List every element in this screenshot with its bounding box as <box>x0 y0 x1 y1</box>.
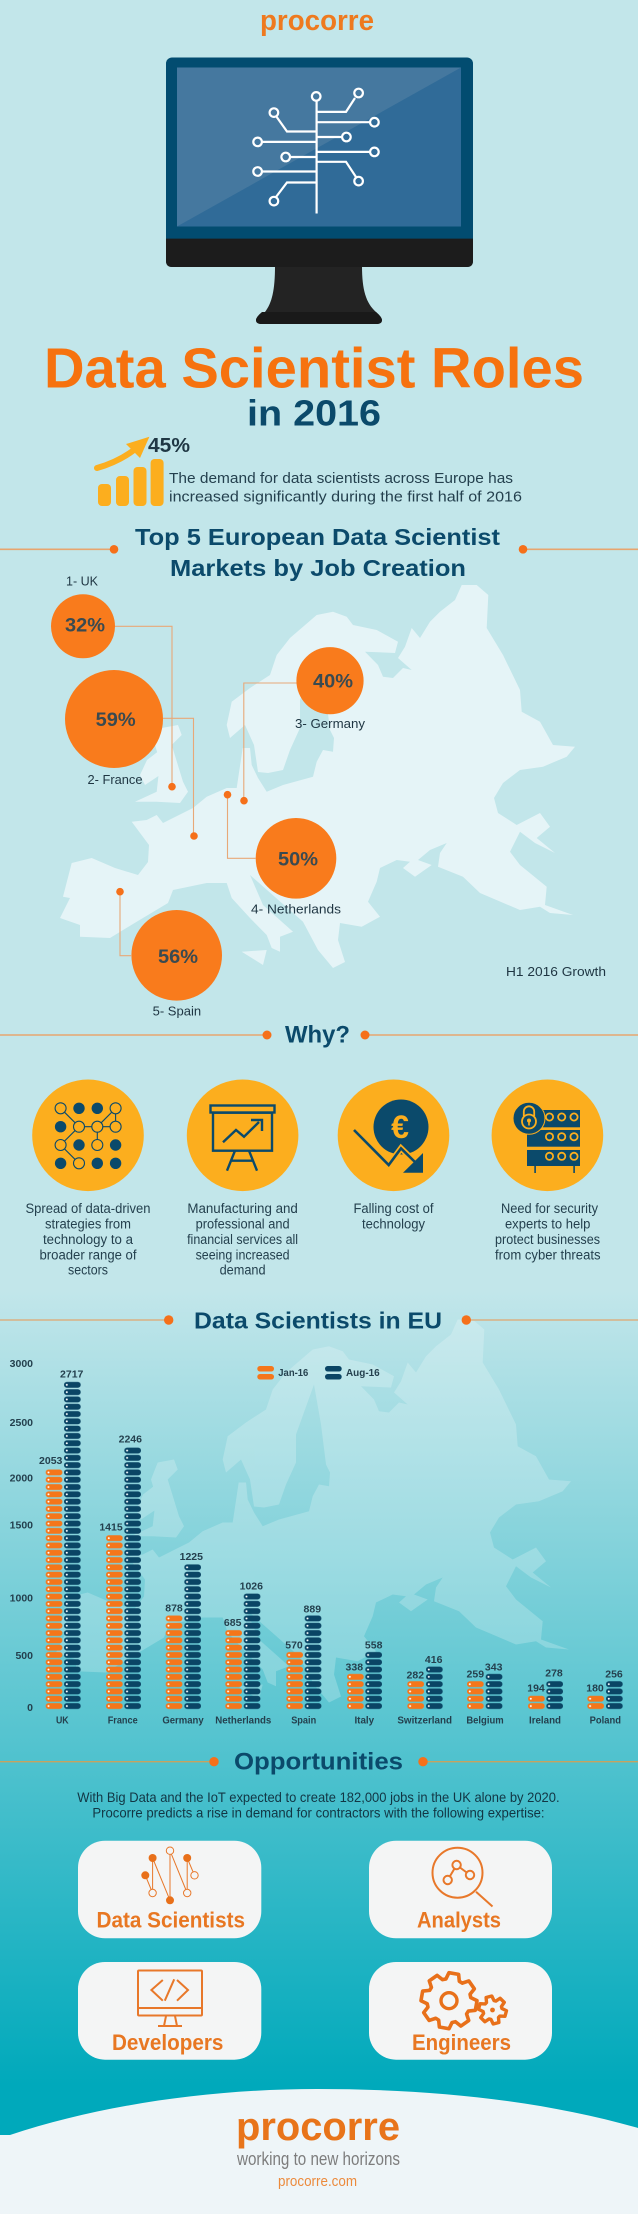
reason: security experts: protect businesses <box>495 1232 600 1247</box>
chart: y axis labels: 2000 <box>10 1472 33 1484</box>
reason: data-driven strategies: technology to a <box>43 1232 133 1247</box>
reason: security experts: Need for security <box>501 1201 598 1216</box>
chart: country labels: Poland <box>590 1714 621 1726</box>
reason: falling cost of technology: technology <box>362 1217 425 1232</box>
reason: falling cost of technology: € <box>391 1109 409 1145</box>
chart: value labels: 416 <box>425 1654 443 1666</box>
market: Germany: 40% <box>313 670 353 692</box>
reason: falling cost of technology: Falling cost of <box>354 1201 434 1216</box>
chart: country labels: UK <box>56 1714 69 1726</box>
market: Spain: 5- Spain <box>153 1004 201 1018</box>
chart: value labels: 278 <box>545 1667 563 1679</box>
chart: country labels: Germany <box>162 1714 204 1726</box>
chart: value labels: 2246 <box>119 1434 142 1446</box>
reason: data-driven strategies <box>26 1080 150 1277</box>
logo: Procorre top: procorre <box>260 5 374 37</box>
footer panel <box>0 2089 638 2214</box>
reason: manufacturing and services: financial services all <box>187 1232 298 1247</box>
market markers <box>116 783 248 896</box>
market: Germany: 3- Germany <box>295 717 366 731</box>
tagline: working to new horizons <box>236 2149 400 2169</box>
market: France: 2- France <box>88 773 143 787</box>
website: procorre.com <box>278 2173 357 2190</box>
chart: country labels: Italy <box>354 1714 374 1726</box>
chart: value labels: 1415 <box>99 1522 123 1534</box>
card: data scientists: Data Scientists <box>96 1907 245 1932</box>
stat: 45% demand: increased significantly during the first half of 2016 <box>169 488 522 505</box>
market: Netherlands: 4- Netherlands <box>251 902 341 916</box>
reason: data-driven strategies: strategies from <box>45 1217 131 1232</box>
chart: bars <box>46 1381 623 1710</box>
map: chart background Europe <box>56 1320 571 1702</box>
market: UK: 32% <box>65 615 105 637</box>
chart legend: Jan-16 <box>278 1367 308 1379</box>
chart: value labels: 256 <box>605 1668 623 1680</box>
title <box>44 336 584 433</box>
chart legend <box>257 1366 380 1380</box>
chart: country labels: France <box>108 1714 138 1726</box>
icon: desktop monitor with circuit <box>166 58 473 324</box>
title: in 2016 <box>247 392 381 433</box>
chart: value labels: 338 <box>346 1661 363 1673</box>
chart: country labels <box>56 1714 621 1726</box>
chart: country labels: Switzerland <box>397 1714 452 1726</box>
chart: y axis labels: 0 <box>27 1702 33 1714</box>
card: analysts: Analysts <box>417 1907 501 1932</box>
note: H1 2016 Growth: H1 2016 Growth <box>506 965 606 979</box>
heading: opportunities <box>0 1748 638 1775</box>
heading: data scientists in EU: Data Scientists in EU <box>194 1307 442 1333</box>
chart: value labels: 259 <box>467 1668 484 1680</box>
heading: why <box>0 1022 638 1049</box>
chart: value labels: 282 <box>407 1669 424 1681</box>
icon: growth bars and arrow <box>97 437 164 506</box>
chart: value labels: 685 <box>224 1617 242 1629</box>
chart: value labels: 343 <box>485 1661 503 1673</box>
chart: country labels: Ireland <box>529 1714 561 1726</box>
map: Europe <box>60 585 575 968</box>
chart: value labels: 558 <box>365 1639 383 1651</box>
heading: opportunities: Opportunities <box>234 1748 403 1775</box>
card: engineers <box>369 1962 552 2060</box>
chart: value labels: 2717 <box>60 1368 84 1380</box>
reason: security experts: from cyber threats <box>495 1247 601 1262</box>
reason: security experts: experts to help <box>505 1217 590 1232</box>
market: Netherlands: 50% <box>278 848 318 870</box>
card: developers: Developers <box>112 2030 223 2055</box>
heading: top 5 markets: Markets by Job Creation <box>170 555 466 581</box>
connector lines <box>115 626 297 956</box>
heading: why: Why? <box>285 1022 350 1049</box>
chart: value labels: 2053 <box>39 1455 63 1467</box>
chart: y axis labels: 500 <box>15 1650 33 1662</box>
market: Spain <box>131 910 222 1018</box>
reason: manufacturing and services <box>187 1080 298 1277</box>
text: opportunities intro: With Big Data and the IoT expected to create 182,000 jobs in the UK alone by 2020. <box>77 1789 560 1805</box>
chart: y axis labels: 1500 <box>10 1520 33 1532</box>
heading: top 5 markets: Top 5 European Data Scientist <box>135 524 500 550</box>
chart: country labels: Belgium <box>466 1714 504 1726</box>
heading: top 5 markets <box>0 524 638 581</box>
chart legend: Aug-16 <box>346 1367 380 1379</box>
chart: y axis labels: 1000 <box>10 1592 33 1604</box>
chart: value labels: 1026 <box>240 1580 263 1592</box>
heading: data scientists in EU <box>0 1307 638 1333</box>
chart: y axis labels: 2500 <box>10 1417 33 1429</box>
market: France: 59% <box>96 709 136 731</box>
reason: data-driven strategies: broader range of <box>40 1247 137 1262</box>
chart: value labels: 1225 <box>180 1551 203 1563</box>
market: Germany <box>295 647 366 731</box>
reason: security experts <box>492 1080 603 1262</box>
card: engineers: Engineers <box>412 2030 511 2055</box>
card: developers <box>78 1962 261 2060</box>
reason: manufacturing and services: demand <box>220 1262 266 1277</box>
chart: value labels: 570 <box>285 1639 303 1651</box>
chart: country labels: Netherlands <box>215 1714 271 1726</box>
market: UK: 1- UK <box>66 574 99 588</box>
title: Data Scientist Roles <box>44 336 584 400</box>
market: France <box>65 670 163 787</box>
market: Spain: 56% <box>158 946 198 968</box>
chart: y axis labels: 3000 <box>10 1358 33 1370</box>
reason: data-driven strategies: sectors <box>68 1262 108 1277</box>
chart: value labels: 180 <box>586 1683 604 1695</box>
reason: manufacturing and services: Manufacturing and <box>187 1201 298 1216</box>
chart: value labels <box>39 1368 623 1695</box>
chart: value labels: 889 <box>304 1604 321 1616</box>
card: analysts <box>369 1841 552 1938</box>
text: opportunities intro <box>77 1789 560 1820</box>
market: Netherlands <box>251 818 341 916</box>
reason: falling cost of technology <box>338 1080 449 1232</box>
chart: value labels: 194 <box>527 1683 545 1695</box>
stat: 45% demand: 45% <box>148 435 190 457</box>
chart: value labels: 878 <box>165 1602 183 1614</box>
card: data scientists <box>78 1841 261 1938</box>
chart: country labels: Spain <box>291 1714 316 1726</box>
reason: manufacturing and services: professional and <box>196 1217 290 1232</box>
chart: y axis labels <box>10 1358 33 1714</box>
reason: data-driven strategies: Spread of data-driven <box>26 1201 150 1216</box>
logo: Procorre footer: procorre <box>236 2105 400 2149</box>
text: opportunities intro: Procorre predicts a rise in demand for contractors with the following expertise: <box>92 1804 545 1820</box>
market: UK <box>51 574 115 658</box>
reason: manufacturing and services: seeing increased <box>196 1247 290 1262</box>
stat: 45% demand <box>148 435 522 505</box>
stat: 45% demand: The demand for data scientists across Europe has <box>169 470 513 487</box>
